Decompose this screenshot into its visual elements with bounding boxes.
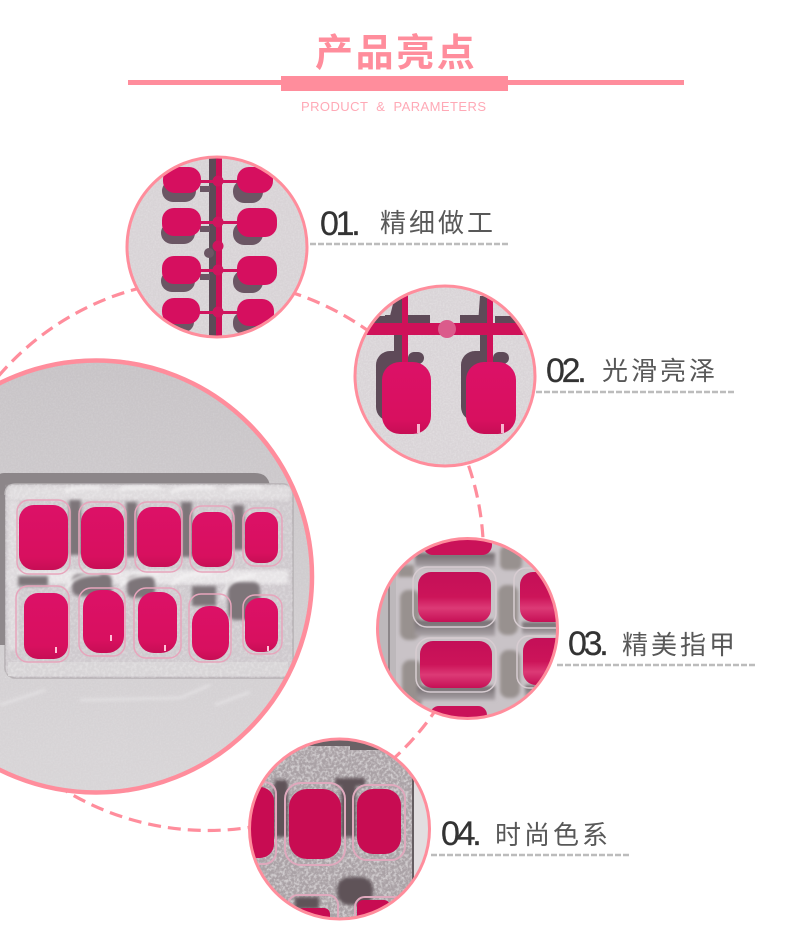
label 02: 02.	[546, 352, 584, 390]
well rims	[412, 566, 556, 693]
tray shadows	[18, 500, 260, 620]
label 04: 04.	[441, 815, 479, 853]
runners	[198, 176, 240, 318]
nails	[251, 787, 401, 917]
button	[438, 320, 456, 338]
label 03: 03.	[568, 625, 606, 663]
circle 2: glossy nails	[350, 280, 540, 470]
circle 1: sprue detail	[126, 156, 308, 338]
circle 4: colour close-up	[248, 738, 431, 920]
label 01: 精细做工	[380, 208, 496, 238]
main photo circle	[0, 350, 330, 810]
title rule	[128, 76, 684, 91]
shadows	[161, 180, 263, 334]
label 02	[536, 352, 735, 392]
title: 产品亮点	[315, 33, 477, 75]
label 03	[557, 625, 756, 665]
wells	[16, 500, 282, 662]
label 02: 光滑亮泽	[602, 356, 718, 386]
nails	[19, 505, 278, 660]
shadows	[374, 296, 516, 419]
nail glints	[55, 635, 269, 653]
label 04: 时尚色系	[495, 820, 611, 850]
well rims	[258, 781, 406, 918]
dashed connector arc	[0, 280, 484, 830]
subtitle: PRODUCT & PARAMETERS	[301, 99, 486, 114]
nails	[418, 572, 556, 688]
spine	[209, 150, 216, 340]
highlights	[66, 487, 262, 600]
label 03: 精美指甲	[622, 630, 738, 660]
nails	[382, 362, 516, 434]
well shoulders	[398, 546, 522, 708]
blister tray	[0, 473, 293, 678]
label 04	[431, 815, 629, 855]
circle 3: blister close-up	[376, 537, 559, 720]
label 01: 01.	[320, 205, 358, 243]
nails	[162, 167, 277, 326]
runners	[366, 296, 524, 362]
dark shadows	[274, 778, 373, 909]
label 01	[310, 205, 509, 244]
